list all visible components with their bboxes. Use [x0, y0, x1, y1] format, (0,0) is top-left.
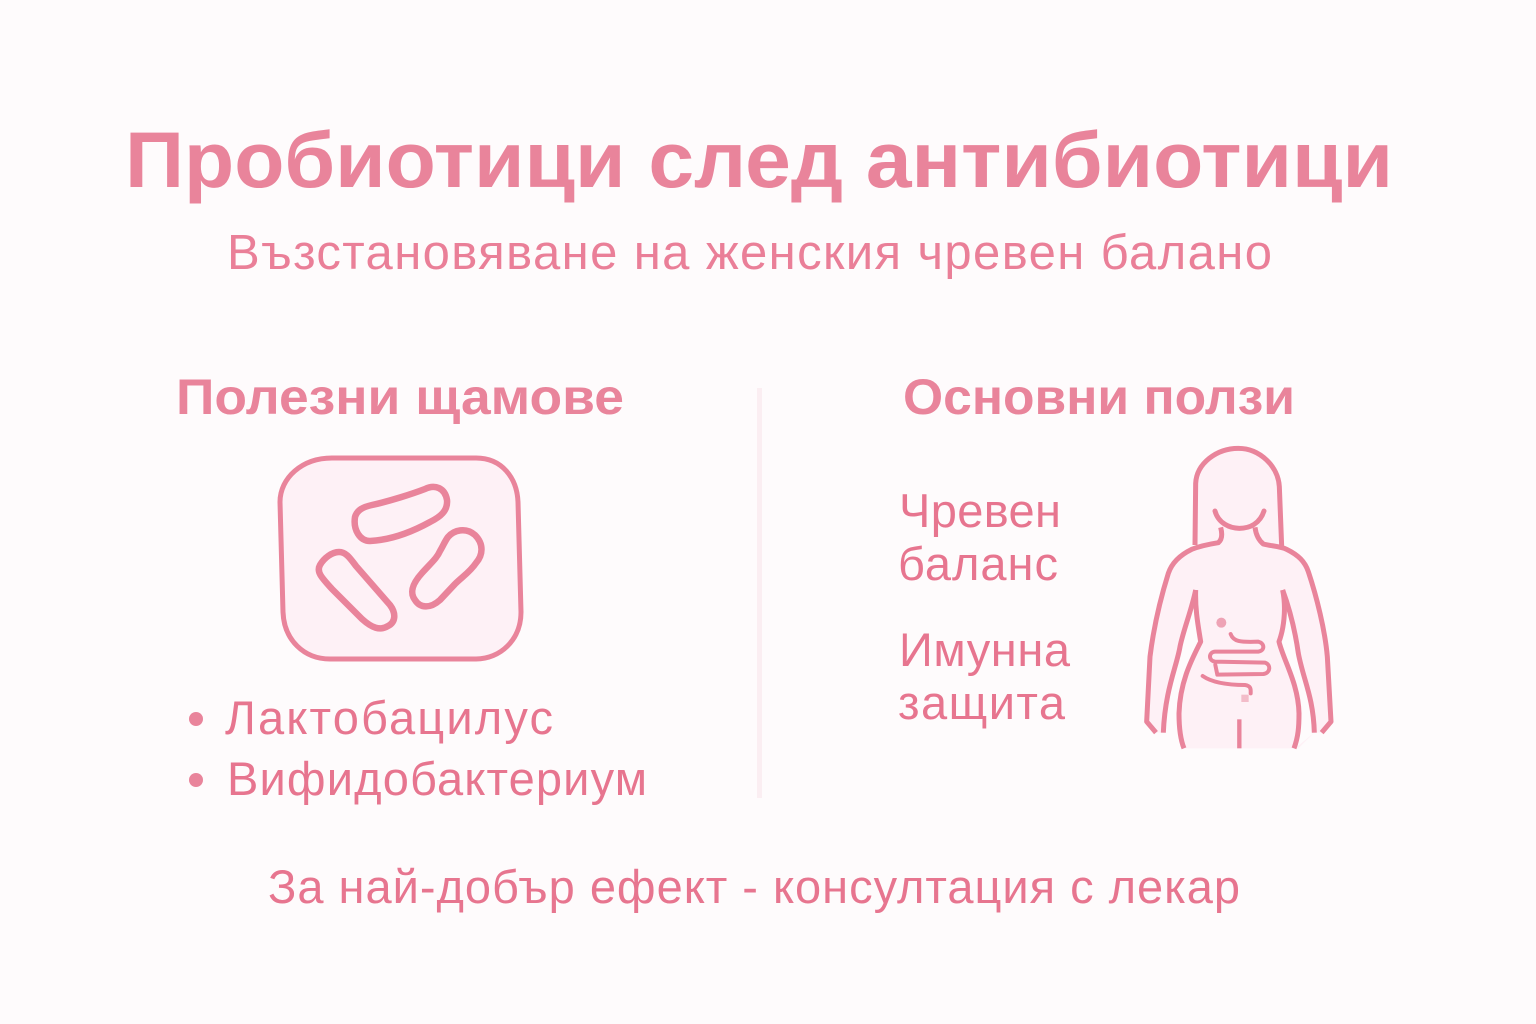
center divider [757, 388, 762, 798]
subtitle: Възстановяване на женския чревен балано [227, 226, 1272, 280]
intestines [1203, 634, 1269, 693]
center leg line [1233, 719, 1246, 748]
right shoulder and arm [1255, 527, 1331, 733]
benefit: immune protection: защита [898, 676, 1066, 729]
icon: bacteria in rounded square [280, 458, 521, 659]
bullet: Lactobacillus: Лактобацилус [225, 691, 553, 744]
benefit: gut balance [898, 484, 1061, 590]
left waist [1179, 590, 1201, 748]
icon: female body with intestines [1147, 448, 1331, 748]
icon frame [280, 458, 521, 659]
footer note: За най-добър ефект - консултация с лекар [268, 860, 1240, 913]
bacterium: top [355, 487, 447, 541]
microbe square [1241, 695, 1249, 702]
heading: useful strains: Полезни щамове [176, 369, 624, 425]
microbe dot [1216, 618, 1226, 628]
bacterium: right [412, 530, 482, 606]
benefit: immune protection [898, 623, 1071, 729]
benefit: gut balance: баланс [898, 537, 1058, 590]
bullet: Bifidobacterium: Вифидобактериум [227, 752, 647, 805]
gap right of waist [1279, 590, 1314, 748]
heading: main benefits: Основни ползи [903, 369, 1295, 425]
left inner arm [1163, 590, 1196, 733]
chin [1215, 511, 1264, 528]
hair outline [1195, 448, 1282, 546]
bacterium: left [319, 552, 394, 628]
benefit: immune protection: Имунна [899, 623, 1071, 676]
body fill [1147, 448, 1331, 748]
right inner arm [1283, 590, 1314, 733]
gap left of waist [1163, 590, 1201, 748]
title: Пробиотици след антибиотици [125, 115, 1393, 204]
left shoulder and arm [1147, 527, 1222, 733]
benefit: gut balance: Чревен [899, 484, 1061, 537]
right waist [1279, 590, 1299, 748]
